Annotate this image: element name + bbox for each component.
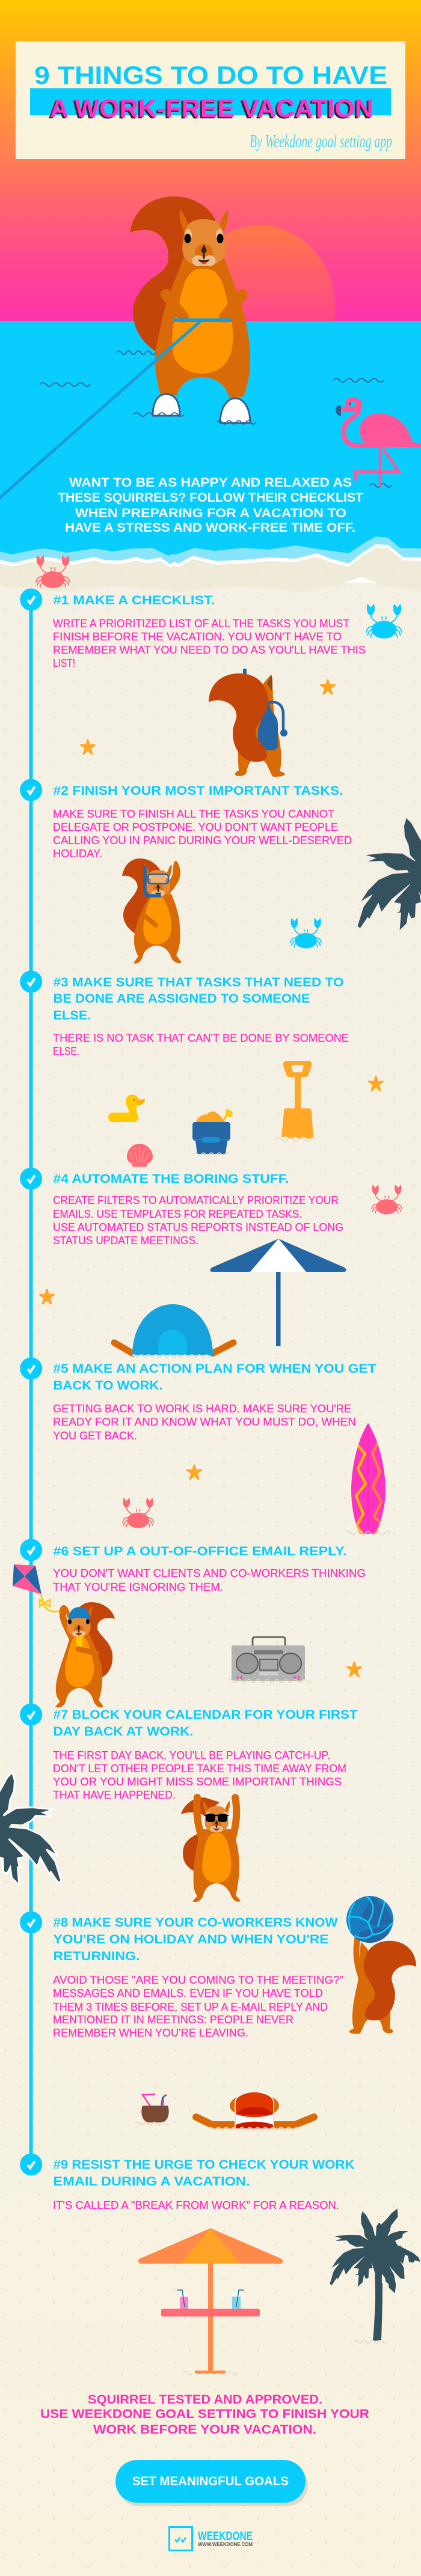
icon: starfish — [369, 1077, 383, 1090]
title line 2: A WORK-FREE VACATION — [48, 96, 372, 124]
heading 8: RETURNING. — [53, 1949, 140, 1963]
body 8 — [53, 1973, 343, 2039]
body 7: YOU OR YOU MIGHT MISS SOME IMPORTANT THINGS — [53, 1775, 342, 1788]
closing text: SQUIRREL TESTED AND APPROVED. — [88, 2392, 322, 2407]
icon: snorkel squirrel — [122, 858, 182, 964]
sea — [0, 321, 421, 561]
step 2 — [20, 779, 352, 860]
heading 9: EMAIL DURING A VACATION. — [53, 2175, 250, 2189]
title bar — [30, 88, 391, 115]
heading 6: #6 SET UP A OUT-OF-OFFICE EMAIL REPLY. — [53, 1545, 346, 1558]
sand background — [0, 541, 421, 2576]
icon: rubber duck — [108, 1095, 145, 1122]
body 8: REMEMBER WHEN YOU'RE LEAVING. — [53, 2026, 248, 2039]
icon: starfish — [40, 1290, 54, 1304]
weekdone logo: WEEKDONE — [198, 2530, 253, 2543]
body 5 — [53, 1402, 356, 1442]
body 6: THAT YOU'RE IGNORING THEM. — [53, 1581, 223, 1593]
body 9: IT'S CALLED A "BREAK FROM WORK" FOR A REASON. — [53, 2199, 339, 2211]
icon: pink crab — [36, 555, 70, 588]
body 4 — [53, 1194, 343, 1247]
closing text: WORK BEFORE YOUR VACATION. — [93, 2422, 316, 2437]
button: SET MEANINGFUL GOALS — [132, 2474, 289, 2488]
body 5: YOU GET BACK. — [53, 1429, 137, 1442]
intro text: HAVE A STRESS AND WORK-FREE TIME OFF. — [65, 521, 355, 535]
pink drink — [177, 2290, 188, 2309]
check badge 1 — [20, 589, 42, 610]
intro text: WANT TO BE AS HAPPY AND RELAXED AS — [69, 476, 352, 490]
body 2: MAKE SURE TO FINISH ALL THE TASKS YOU CANNOT — [53, 807, 334, 820]
body 5: GETTING BACK TO WORK IS HARD. MAKE SURE YOU'RE — [53, 1402, 351, 1415]
check badge 7 — [20, 1704, 42, 1725]
body 8: THEM 3 TIMES BEFORE, SET UP A E-MAIL REPLY AND — [53, 2000, 328, 2013]
heading 2: #2 FINISH YOUR MOST IMPORTANT TASKS. — [53, 784, 343, 798]
heading 9 — [53, 2158, 355, 2189]
body 2: DELEGATE OR POSTPONE. YOU DON'T WANT PEOPLE — [53, 821, 338, 833]
heading 3: BE DONE ARE ASSIGNED TO SOMEONE — [53, 992, 310, 1006]
step 9 — [20, 2153, 354, 2211]
icon: palm tree bottom right — [330, 2209, 420, 2343]
body 7: THAT HAVE HAPPENED. — [53, 1788, 176, 1801]
step 1 — [20, 589, 366, 669]
sun — [183, 225, 335, 321]
icon: boombox — [228, 1637, 312, 1682]
body 7: DON'T LET OTHER PEOPLE TAKE THIS TIME AWAY FROM — [53, 1762, 346, 1775]
check badge 5 — [20, 1358, 42, 1379]
shoreline — [0, 536, 421, 592]
button — [115, 2460, 308, 2506]
heading 8: #8 MAKE SURE YOUR CO-WORKERS KNOW — [53, 1916, 338, 1930]
body 1: REMEMBER WHAT YOU NEED TO DO AS YOU'LL HAVE THIS — [53, 643, 366, 656]
icon: orange umbrella and table — [138, 2228, 283, 2374]
step 4 — [20, 1168, 343, 1247]
icon: blue crab — [366, 604, 402, 639]
check badge 2 — [20, 779, 42, 801]
icon: coconut drink — [135, 2094, 169, 2125]
check badge 9 — [20, 2153, 42, 2176]
step 3 — [20, 971, 349, 1057]
weekdone logo — [170, 2527, 253, 2551]
icon: sand bucket — [192, 1110, 232, 1155]
water ripples — [40, 351, 392, 487]
icon: diver squirrel with tank — [209, 669, 287, 777]
heading 9: #9 RESIST THE URGE TO CHECK YOUR WORK — [53, 2158, 355, 2172]
icon: pink crab — [123, 1498, 153, 1528]
icon: squirrel in sunglasses — [181, 1797, 241, 1902]
check badge 4 — [20, 1168, 42, 1189]
body 4: USE AUTOMATED STATUS REPORTS INSTEAD OF LONG — [53, 1221, 343, 1233]
timeline line — [29, 600, 32, 2164]
body 3: ELSE. — [53, 1045, 79, 1057]
check badge 3 — [20, 971, 42, 992]
icon: squirrel under blue towel — [114, 1304, 233, 1357]
heading 8 — [53, 1916, 338, 1963]
title line 2: A WORK-FREE VACATION — [50, 94, 373, 123]
icon: lying squirrel in red shorts — [196, 2092, 314, 2130]
body 8: MESSAGES AND EMAILS. EVEN IF YOU HAVE TOLD — [53, 1987, 323, 1999]
intro text — [58, 476, 363, 535]
step 6 — [20, 1539, 366, 1593]
intro text: WHEN PREPARING FOR A VACATION TO — [75, 506, 346, 520]
icon: kite — [13, 1564, 62, 1612]
heading 8: YOU'RE ON HOLIDAY AND WHEN YOU'RE — [53, 1933, 328, 1946]
heading 7: DAY BACK AT WORK. — [53, 1725, 194, 1739]
step 7 — [20, 1704, 358, 1801]
icon: starfish — [188, 1465, 201, 1479]
icon: palm tree right — [357, 813, 421, 952]
title line 1: 9 THINGS TO DO TO HAVE — [34, 61, 387, 90]
icon: blue crab — [290, 918, 321, 949]
body 2: HOLIDAY. — [53, 847, 102, 860]
icon: starfish — [81, 740, 94, 754]
intro text: THESE SQUIRRELS? FOLLOW THEIR CHECKLIST — [58, 491, 363, 505]
heading 3: ELSE. — [53, 1009, 91, 1022]
icon: palm tree left — [0, 1768, 61, 1906]
heading 7 — [53, 1708, 358, 1739]
body 4: EMAILS. USE TEMPLATES FOR REPEATED TASKS. — [53, 1208, 302, 1220]
body 3 — [53, 1031, 349, 1057]
check badge 6 — [20, 1539, 42, 1561]
heading 5 — [53, 1362, 376, 1393]
icon: starfish — [321, 680, 334, 694]
weekdone logo: WWW.WEEKDONE.COM — [198, 2541, 253, 2547]
body 8: AVOID THOSE "ARE YOU COMING TO THE MEETING?" — [53, 1973, 343, 1986]
heading 7: #7 BLOCK YOUR CALENDAR FOR YOUR FIRST — [53, 1708, 358, 1722]
body 1: LIST! — [53, 657, 75, 669]
check badge 8 — [20, 1912, 42, 1933]
title card — [16, 41, 405, 159]
body 6: YOU DON'T WANT CLIENTS AND CO-WORKERS THINKING — [53, 1567, 366, 1579]
body 4: CREATE FILTERS TO AUTOMATICALLY PRIORITIZE YOUR — [53, 1194, 339, 1206]
heading 5: BACK TO WORK. — [53, 1379, 162, 1393]
icon: surfboard — [346, 1423, 390, 1536]
icon: squirrel with kite and popsicle — [55, 1602, 115, 1707]
heading 4: #4 AUTOMATE THE BORING STUFF. — [53, 1172, 289, 1186]
closing text: USE WEEKDONE GOAL SETTING TO FINISH YOUR — [40, 2407, 369, 2421]
step 5 — [20, 1358, 376, 1442]
body 8: MENTIONED IT IN MEETINGS: PEOPLE NEVER — [53, 2013, 293, 2026]
closing text — [40, 2392, 369, 2437]
icon: squirrel with volleyball — [346, 1896, 416, 2034]
icon: blue beach umbrella — [210, 1239, 346, 1346]
body 1: FINISH BEFORE THE VACATION. YOU WON'T HAVE TO — [53, 630, 342, 643]
body 5: READY FOR IT AND KNOW WHAT YOU MUST DO, WHEN — [53, 1415, 356, 1428]
sky bands — [0, 252, 421, 321]
body 2: CALLING YOU IN PANIC DURING YOUR WELL-DESERVED — [53, 834, 352, 846]
body 2 — [53, 807, 352, 860]
heading 1: #1 MAKE A CHECKLIST. — [53, 594, 215, 607]
body 7: THE FIRST DAY BACK, YOU'LL BE PLAYING CATCH-UP. — [53, 1749, 330, 1761]
main squirrel waterskiing — [130, 196, 250, 423]
icon: pink crab — [372, 1185, 402, 1215]
body 4: STATUS UPDATE MEETINGS. — [53, 1234, 198, 1247]
sunset sky — [0, 0, 421, 321]
tow rope — [0, 321, 200, 499]
body 1: WRITE A PRIORITIZED LIST OF ALL THE TASKS YOU MUST — [53, 617, 349, 630]
icon: shovel — [276, 1061, 316, 1141]
flamingo — [336, 399, 421, 485]
body 3: THERE IS NO TASK THAT CAN'T BE DONE BY SOMEONE — [53, 1031, 349, 1044]
blue drink — [232, 2290, 244, 2309]
heading 5: #5 MAKE AN ACTION PLAN FOR WHEN YOU GET — [53, 1362, 376, 1376]
body 7 — [53, 1749, 346, 1801]
heading 3 — [53, 976, 344, 1022]
icon: starfish — [348, 1662, 361, 1676]
body 6 — [53, 1567, 366, 1593]
icon: seashell — [127, 1144, 153, 1167]
heading 3: #3 MAKE SURE THAT TASKS THAT NEED TO — [53, 976, 344, 989]
body 1 — [53, 617, 366, 669]
step 8 — [20, 1912, 343, 2039]
